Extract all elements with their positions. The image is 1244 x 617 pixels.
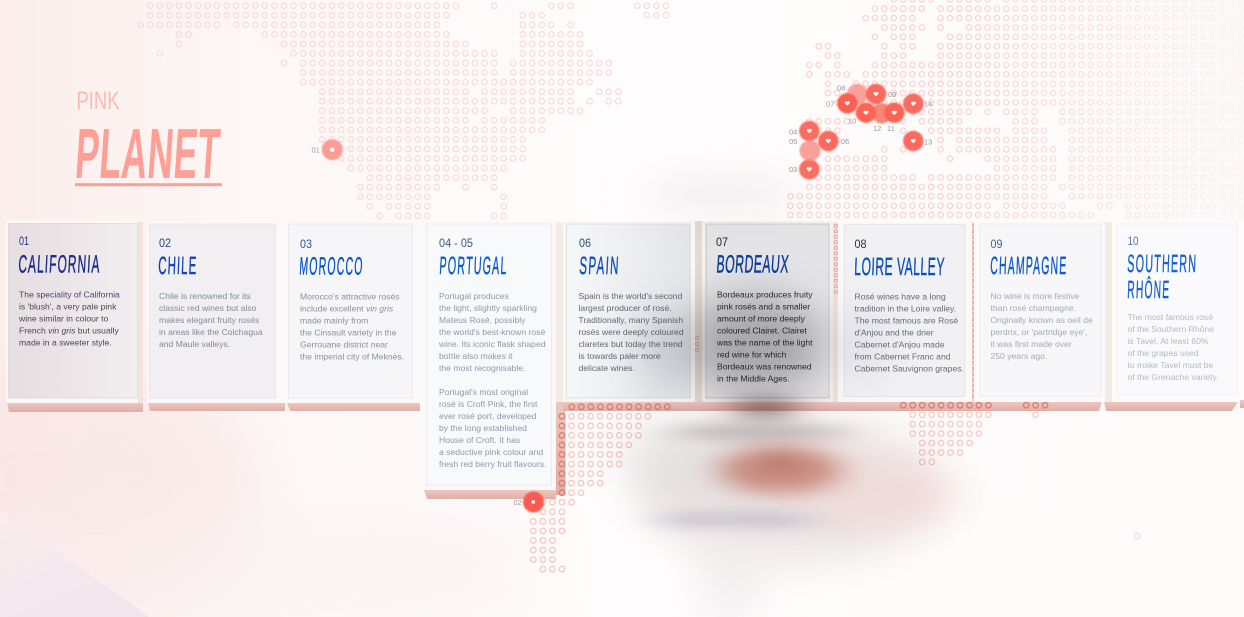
world map: isolated dot	[1134, 533, 1140, 539]
body text: delicate wines.	[578, 363, 635, 373]
body text: Bordeaux was renowned	[717, 362, 812, 372]
body text: the Cinsault variety in the	[300, 328, 397, 338]
map marker 05: 05	[789, 137, 797, 146]
blurred passer-by figure	[620, 179, 960, 617]
card 07 Bordeaux	[702, 221, 833, 402]
body text: French vin gris but usually	[19, 326, 119, 336]
body text: bottle also makes it	[439, 351, 513, 361]
body text: fresh red berry fruit flavours.	[439, 459, 546, 469]
card 04-05 Portugal	[423, 220, 556, 490]
body text: amount of more deeply	[717, 314, 806, 324]
map marker 06	[818, 131, 849, 151]
body text: made in a sweeter style.	[19, 338, 112, 348]
map marker 13: 13	[924, 138, 932, 146]
body text: House of Croft. It has	[439, 435, 520, 445]
number: 04 - 05	[439, 238, 473, 250]
title line: PLANET with underline: PLANET	[73, 114, 223, 193]
body text: made mainly from	[300, 316, 368, 326]
map marker 09	[866, 84, 896, 104]
body text: and Maule valleys.	[159, 339, 230, 349]
card 03 Morocco	[286, 221, 417, 403]
body text: makes elegant fruity rosés	[159, 315, 259, 325]
body text: rosés were deeply coloured	[578, 327, 684, 337]
map marker 01	[312, 139, 343, 160]
card 06 Spain	[563, 221, 695, 402]
card 01 California	[6, 220, 138, 403]
body text: coloured Clairet. Clairet	[717, 326, 807, 336]
body text: from Cabernet Franc and	[854, 352, 951, 362]
heading: CHILE	[158, 252, 197, 280]
body text: of the grapes used	[1128, 348, 1199, 358]
map marker 02	[514, 492, 544, 512]
body text: The most famous rosé	[1128, 312, 1213, 322]
body text: the light, slightly sparkling	[439, 303, 537, 313]
world map: Americas dots	[136, 6, 671, 216]
body text: largest producer of rosé.	[578, 303, 672, 313]
world map: southern Africa dots	[908, 415, 1040, 462]
body text: of the Grenache variety.	[1128, 372, 1219, 382]
map marker 09: 09	[888, 90, 896, 99]
body text: wine. Its iconic flask shaped	[438, 339, 546, 349]
card base shadows	[7, 221, 1244, 499]
map marker 11	[884, 102, 904, 133]
map marker 10: 10	[848, 116, 856, 126]
body text: ever rosé port, developed	[439, 411, 537, 421]
map marker 06: 06	[841, 137, 849, 146]
body text: of the Southern Rhône	[1128, 324, 1214, 334]
body text: is towards paler more	[578, 351, 661, 361]
body text: Spain is the world's second	[578, 291, 683, 301]
number: 07	[716, 237, 728, 249]
map marker 14	[903, 94, 932, 114]
number: 08	[854, 239, 866, 251]
body text: Cabernet Sauvignon grapes.	[854, 364, 964, 374]
body text: wine similar in colour to	[18, 314, 109, 324]
body text: Originally known as oeil de	[990, 315, 1093, 325]
number: 09	[990, 239, 1002, 251]
heading	[1127, 251, 1197, 305]
body text: it was first made over	[990, 339, 1072, 349]
map marker 03: 03	[789, 165, 797, 174]
body text: Portugal's most original	[439, 387, 528, 397]
body text: Bordeaux produces fruity	[717, 290, 813, 300]
body text: tradition in the Loire valley.	[854, 304, 956, 314]
title line: PINK: PINK	[76, 87, 120, 115]
body text: the world's best-known rosé	[439, 327, 545, 337]
body text: perdrix, or 'partridge eye',	[990, 327, 1087, 337]
map marker 07: 07	[826, 100, 834, 108]
body text: The most famous are Rosé	[854, 316, 958, 326]
map marker 01: 01	[312, 146, 320, 154]
heading: CALIFORNIA	[18, 251, 101, 279]
right side fade of the map	[960, 0, 1244, 222]
heading: PORTUGAL	[439, 253, 507, 280]
map marker 04: 04	[789, 128, 797, 136]
map marker 05	[789, 137, 820, 161]
map marker 03	[789, 159, 820, 180]
number: 06	[579, 238, 591, 250]
map marker 12: 12	[873, 124, 881, 133]
card 09 Champagne	[974, 222, 1105, 402]
body text: Gerrouane district near	[300, 340, 388, 350]
card 08 Loire Valley	[838, 222, 972, 402]
body text: the most recognisable.	[439, 363, 525, 373]
world map: South America dots	[529, 416, 653, 569]
heading: LOIRE VALLEY	[854, 253, 945, 281]
body text: pink rosés and a smaller	[717, 302, 810, 312]
heading: RHÔNE	[1127, 276, 1170, 305]
heading: BORDEAUX	[716, 251, 790, 279]
map marker 10	[848, 102, 876, 126]
body text: Rosé wines have a long	[854, 292, 946, 302]
body text: is Tavel. At least 60%	[1128, 336, 1209, 346]
body text: The speciality of California	[19, 290, 120, 300]
map marker 11: 11	[887, 124, 895, 133]
map marker 04	[789, 121, 820, 141]
body text: include excellent vin gris	[300, 304, 393, 314]
number: 01	[19, 236, 29, 248]
body text: Morocco's attractive rosés	[300, 292, 400, 302]
body text: red wine for which	[717, 350, 786, 360]
body text: classic red wines but also	[159, 303, 257, 313]
number: 02	[159, 238, 171, 250]
body text: No wine is more festive	[990, 291, 1080, 301]
body text: is 'blush', a very pale pink	[19, 302, 117, 312]
heading: SOUTHERN	[1127, 251, 1197, 278]
body text: Cabernet d'Anjou made	[854, 340, 945, 350]
map marker 14: 14	[924, 100, 932, 108]
heading: MOROCCO	[299, 254, 363, 281]
heading: CHAMPAGNE	[990, 253, 1067, 281]
body text: than rosé champagne.	[990, 303, 1076, 313]
number: 10	[1128, 236, 1138, 248]
world map: Europe, Africa and Asia dots	[786, 0, 1244, 215]
body text: in areas like the Colchagua	[159, 327, 263, 337]
body text: to make Tavel must be	[1128, 360, 1214, 370]
body text: Mateus Rosé, possibly	[439, 315, 526, 325]
body text: in the Middle Ages.	[717, 374, 790, 384]
body text: Portugal produces	[439, 291, 509, 301]
map marker 12	[872, 103, 892, 133]
body text: a seductive pink colour and	[439, 447, 543, 457]
darker dots on card shadows	[562, 223, 1050, 498]
body text: claretes but today the trend	[578, 339, 683, 349]
map marker 02: 02	[514, 498, 522, 507]
body text: by the long established	[439, 423, 527, 433]
body text: d'Anjou and the drier	[854, 328, 934, 338]
map marker 08	[837, 84, 868, 105]
body text: Traditionally, many Spanish	[578, 315, 683, 325]
body text: 250 years ago.	[990, 351, 1047, 361]
body text: was the name of the light	[716, 338, 813, 348]
map marker 07	[826, 93, 858, 114]
map marker 08: 08	[837, 84, 845, 92]
body text: rosé is Croft Pink, the first	[439, 399, 538, 409]
card 02 Chile	[147, 221, 278, 403]
heading: SPAIN	[579, 252, 619, 280]
number: 03	[300, 239, 312, 251]
body text: Chile is renowned for its	[159, 291, 251, 301]
map marker 13	[903, 131, 932, 151]
body text: the imperial city of Meknès.	[300, 352, 404, 362]
card 10 Southern Rhone	[1112, 222, 1242, 400]
